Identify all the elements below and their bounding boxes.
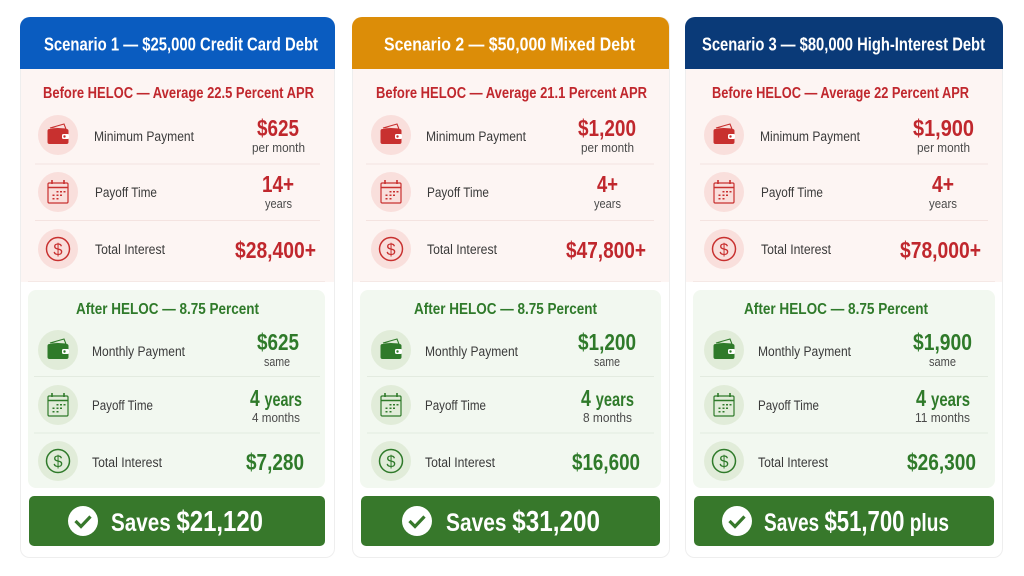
- row: payoff time: Payoff Time: [425, 398, 486, 413]
- row: payoff time: Payoff Time: [761, 185, 823, 200]
- row: payoff time: [704, 385, 970, 425]
- row: total interest: $16,600: [572, 449, 640, 475]
- row: payoff time: 4+: [597, 171, 618, 197]
- after panel: [28, 290, 325, 488]
- panel: scenario 1: [20, 17, 335, 558]
- row: payoff time: years: [594, 196, 621, 211]
- savings banner: [361, 496, 660, 546]
- before heading: Before HELOC — Average 22 Percent APR: [712, 85, 969, 102]
- row: total interest: [38, 229, 316, 269]
- row: payoff time: 8 months: [583, 410, 632, 425]
- row: monthly payment: $625: [257, 329, 299, 355]
- row: total interest: $78,000+: [900, 237, 981, 263]
- panel: scenario 3: [685, 17, 1003, 558]
- row: payoff time: [371, 171, 621, 212]
- savings banner: [694, 496, 994, 546]
- row: total interest: $7,280: [246, 449, 304, 475]
- row: minimum payment: $625: [257, 115, 299, 141]
- panel: scenario 2: [352, 17, 670, 558]
- row: payoff time: [38, 171, 294, 212]
- row: total interest: [704, 441, 976, 481]
- row: minimum payment: [38, 115, 305, 155]
- row: minimum payment: $1,200: [578, 115, 636, 141]
- row: total interest: Total Interest: [427, 242, 497, 257]
- before panel: [686, 69, 1002, 282]
- row: monthly payment: [38, 329, 299, 370]
- row: monthly payment: $1,200: [578, 329, 636, 355]
- row: payoff time: 11 months: [915, 410, 970, 425]
- row: minimum payment: [704, 115, 974, 155]
- row: total interest: $28,400+: [235, 237, 316, 263]
- row: minimum payment: per month: [917, 140, 970, 155]
- scenario 2 header: Scenario 2 — $50,000 Mixed Debt: [384, 34, 635, 54]
- before panel: [353, 69, 669, 282]
- row: payoff time: Payoff Time: [95, 185, 157, 200]
- row: minimum payment: per month: [581, 140, 634, 155]
- row: monthly payment: $1,900: [913, 329, 972, 355]
- after heading: After HELOC — 8.75 Percent: [744, 301, 929, 318]
- scenario 3 header: [685, 17, 1003, 69]
- row: payoff time: Payoff Time: [758, 398, 819, 413]
- row: monthly payment: Monthly Payment: [758, 344, 851, 359]
- after heading: After HELOC — 8.75 Percent: [414, 301, 598, 318]
- row: total interest: $26,300: [907, 449, 976, 475]
- after panel: [360, 290, 661, 488]
- row: payoff time: 14+: [262, 171, 294, 197]
- row: payoff time: 4 months: [252, 410, 300, 425]
- row: monthly payment: Monthly Payment: [425, 344, 518, 359]
- row: minimum payment: per month: [252, 140, 305, 155]
- row: total interest: Total Interest: [92, 455, 162, 470]
- row: monthly payment: same: [929, 354, 956, 369]
- row: payoff time: 4+: [932, 171, 954, 197]
- scenario 1 header: [20, 17, 335, 69]
- row: monthly payment: [371, 329, 636, 370]
- scenario 1 header: Scenario 1 — $25,000 Credit Card Debt: [44, 34, 318, 54]
- row: total interest: [371, 441, 640, 481]
- row: total interest: [371, 229, 646, 269]
- after panel: [693, 290, 995, 488]
- row: payoff time: years: [929, 196, 957, 211]
- row: payoff time: 4 years: [916, 385, 970, 411]
- row: minimum payment: $1,900: [913, 115, 974, 141]
- row: payoff time: Payoff Time: [92, 398, 153, 413]
- row: total interest: [704, 229, 981, 269]
- before heading: Before HELOC — Average 21.1 Percent APR: [376, 85, 647, 102]
- before panel: [21, 69, 334, 282]
- row: payoff time: 4 years: [581, 385, 634, 411]
- row: minimum payment: [371, 115, 636, 155]
- row: total interest: $47,800+: [566, 237, 646, 263]
- row: total interest: Total Interest: [425, 455, 495, 470]
- row: monthly payment: Monthly Payment: [92, 344, 185, 359]
- savings banner: [29, 496, 325, 546]
- row: payoff time: years: [265, 196, 292, 211]
- row: payoff time: [38, 385, 302, 425]
- row: minimum payment: Minimum Payment: [426, 129, 526, 144]
- row: monthly payment: same: [594, 354, 620, 369]
- row: minimum payment: Minimum Payment: [94, 129, 194, 144]
- savings banner: Saves $21,120: [111, 506, 263, 538]
- before heading: Before HELOC — Average 22.5 Percent APR: [43, 85, 314, 102]
- row: payoff time: Payoff Time: [427, 185, 489, 200]
- after heading: After HELOC — 8.75 Percent: [76, 301, 260, 318]
- row: minimum payment: Minimum Payment: [760, 129, 860, 144]
- row: monthly payment: same: [264, 354, 290, 369]
- row: total interest: Total Interest: [95, 242, 165, 257]
- savings banner: Saves $51,700 plus: [764, 506, 949, 538]
- row: payoff time: 4 years: [250, 385, 302, 411]
- scenario 2 header: [352, 17, 669, 69]
- row: payoff time: [704, 171, 957, 212]
- row: total interest: Total Interest: [758, 455, 828, 470]
- savings banner: Saves $31,200: [446, 506, 600, 538]
- row: payoff time: [371, 385, 634, 425]
- row: total interest: Total Interest: [761, 242, 831, 257]
- row: total interest: [38, 441, 304, 481]
- row: monthly payment: [704, 329, 972, 370]
